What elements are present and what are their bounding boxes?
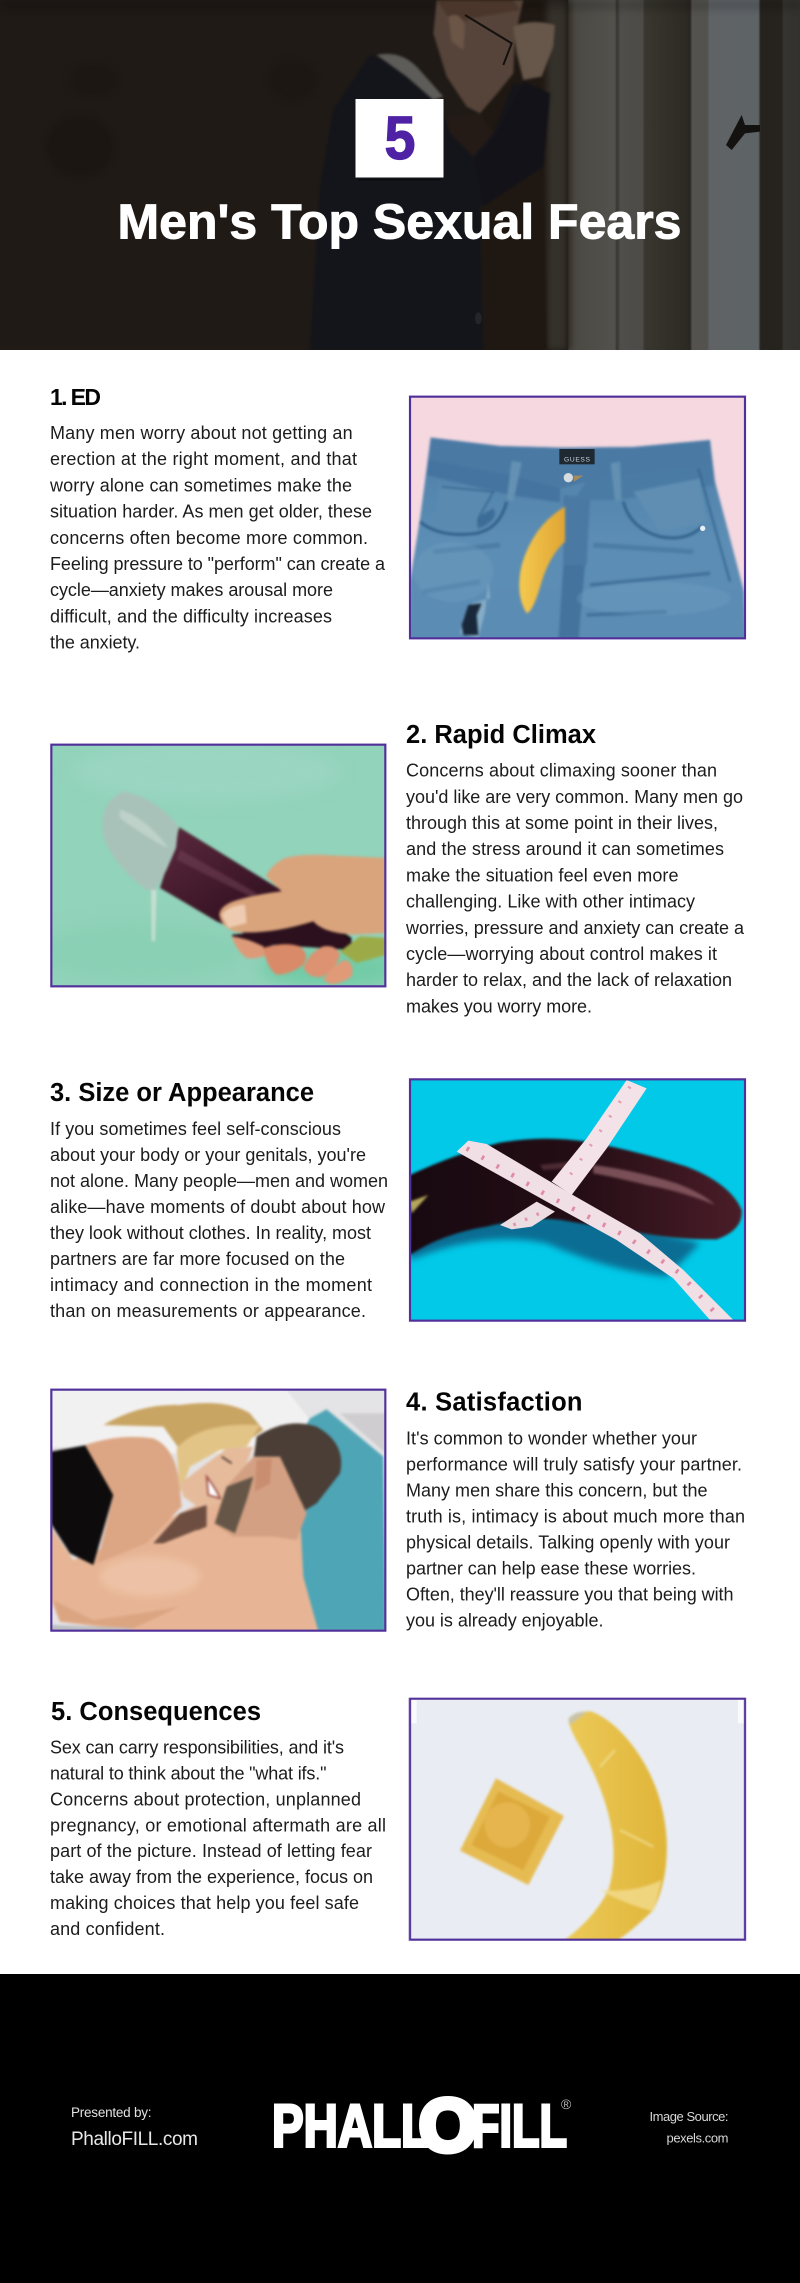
text block: ED: Feeling pressure to "perform" can create a [50,554,386,574]
logo: O [419,2084,477,2167]
text block: Rapid Climax: through this at some point in their lives, [406,813,718,833]
image: eggplant in hand [33,741,407,988]
text block: ED: concerns often become more common. [50,528,368,548]
presented by: Presented by: [71,2105,152,2120]
logo: ® [561,2096,572,2112]
text block: Consequences: part of the picture. Instead of letting fear [50,1841,372,1861]
text block: ED: situation harder. As men get older, these [50,502,372,522]
collar [377,54,443,100]
panel: 2. Rapid Climax [33,721,745,1016]
panel: 4. Satisfaction [51,1388,745,1631]
text block: Consequences: making choices that help you feel safe [50,1893,359,1913]
text block: Satisfaction: you is already enjoyable. [406,1610,604,1630]
text block: Satisfaction [406,1428,745,1630]
text block: Rapid Climax [405,761,745,1016]
text block: Consequences: Sex can carry responsibilities, and it's [50,1738,344,1758]
text block: Satisfaction: Often, they'll reassure you that being with [406,1584,734,1604]
text block: Size or Appearance: partners are far more focused on the [50,1249,345,1269]
image: couple in bed [51,1389,386,1631]
logo: PHALL [272,2092,430,2160]
hand [513,22,555,80]
logo [272,2084,572,2167]
text block: Consequences: natural to think about the "what ifs." [50,1764,326,1784]
text block: Consequences [50,1738,386,1939]
text block: Size or Appearance: than on measurements or appearance. [50,1301,366,1321]
presented by: PhalloFILL.com [71,2129,198,2150]
text block: Rapid Climax: harder to relax, and the lack of relaxation [406,970,732,990]
text block: Size or Appearance: they look without clothes. In reality, most [50,1223,371,1243]
text block: Size or Appearance [50,1119,388,1321]
text block: Size or Appearance: If you sometimes feel self-conscious [50,1119,341,1139]
text block: Rapid Climax: cycle—worrying about control makes it [406,944,717,964]
text block: Rapid Climax: and the stress around it can sometimes [406,839,724,859]
number 5: 5 [384,104,416,172]
image: jeans with banana: GUESS [564,457,591,464]
text block: Consequences: pregnancy, or emotional aftermath are all [50,1815,386,1835]
text block: Size or Appearance: not alone. Many people—men and women [50,1171,388,1191]
text block: ED [49,423,386,653]
heading: 3. Size or Appearance: 3. Size or Appearance [50,1079,314,1107]
image: jeans with banana [409,396,746,642]
text block: Consequences: take away from the experience, focus on [50,1867,373,1887]
glasses [465,15,512,65]
text block: Satisfaction: Many men share this concern, but the [406,1480,708,1500]
image: banana with condom [409,1698,746,1943]
logo: FILL [472,2092,567,2160]
text block: Consequences: and confident. [50,1919,165,1939]
text block: Satisfaction: It's common to wonder whether your [406,1428,697,1448]
neck shadow [448,124,482,156]
heading: 2. Rapid Climax: 2. Rapid Climax [406,721,596,749]
text block: ED: worry alone can sometimes make the [49,475,352,495]
text block: Rapid Climax: worries, pressure and anxiety can create a [405,918,745,938]
text block: Rapid Climax: Concerns about climaxing sooner than [406,761,717,781]
image source [650,2109,728,2146]
text block: Satisfaction: partner can help ease these worries. [406,1558,696,1578]
text block: Rapid Climax: makes you worry more. [406,996,592,1016]
header banner [0,0,800,350]
suit [311,56,520,350]
text block: Satisfaction: physical details. Talking openly with your [406,1532,730,1552]
image source: pexels.com [666,2130,728,2146]
text block: Consequences: Concerns about protection, unplanned [50,1789,361,1809]
head [433,0,523,113]
heading: 5. Consequences: 5. Consequences [51,1698,261,1726]
image source: Image Source: [650,2109,728,2124]
text block: Satisfaction: truth is, intimacy is about much more than [406,1506,745,1526]
text block: ED: difficult, and the difficulty increases [50,606,332,626]
heading: 4. Satisfaction: 4. Satisfaction [406,1388,582,1416]
presented by [71,2105,198,2150]
heading: 1. ED: 1. ED [50,384,101,410]
panel: 1. ED [49,384,746,653]
title: Men's Top Sexual Fears [118,196,682,250]
number badge [356,99,444,180]
text block: Size or Appearance: about your body or your genitals, you're [50,1145,366,1165]
text block: Rapid Climax: challenging. Like with other intimacy [406,892,695,912]
text block: Satisfaction: performance will truly satisfy your partner. [406,1454,742,1474]
text block: ED: cycle—anxiety makes arousal more [50,580,333,600]
text block: ED: Many men worry about not getting an [50,423,353,443]
text block: ED: erection at the right moment, and that [50,449,357,469]
image: eggplant with tape measure [409,1079,746,1321]
footer [0,1974,800,2283]
text block: Size or Appearance: alike—have moments of doubt about how [50,1197,386,1217]
panel: 3. Size or Appearance [50,1079,746,1321]
header photo: man leaning on wall [0,0,800,350]
panel: 5. Consequences [50,1698,746,1943]
text block: Size or Appearance: intimacy and connection in the moment [50,1275,372,1295]
text block: Rapid Climax: you'd like are very common. Many men go [406,787,743,807]
text block: ED: the anxiety. [50,633,140,653]
text block: Rapid Climax: make the situation feel even more [406,865,678,885]
